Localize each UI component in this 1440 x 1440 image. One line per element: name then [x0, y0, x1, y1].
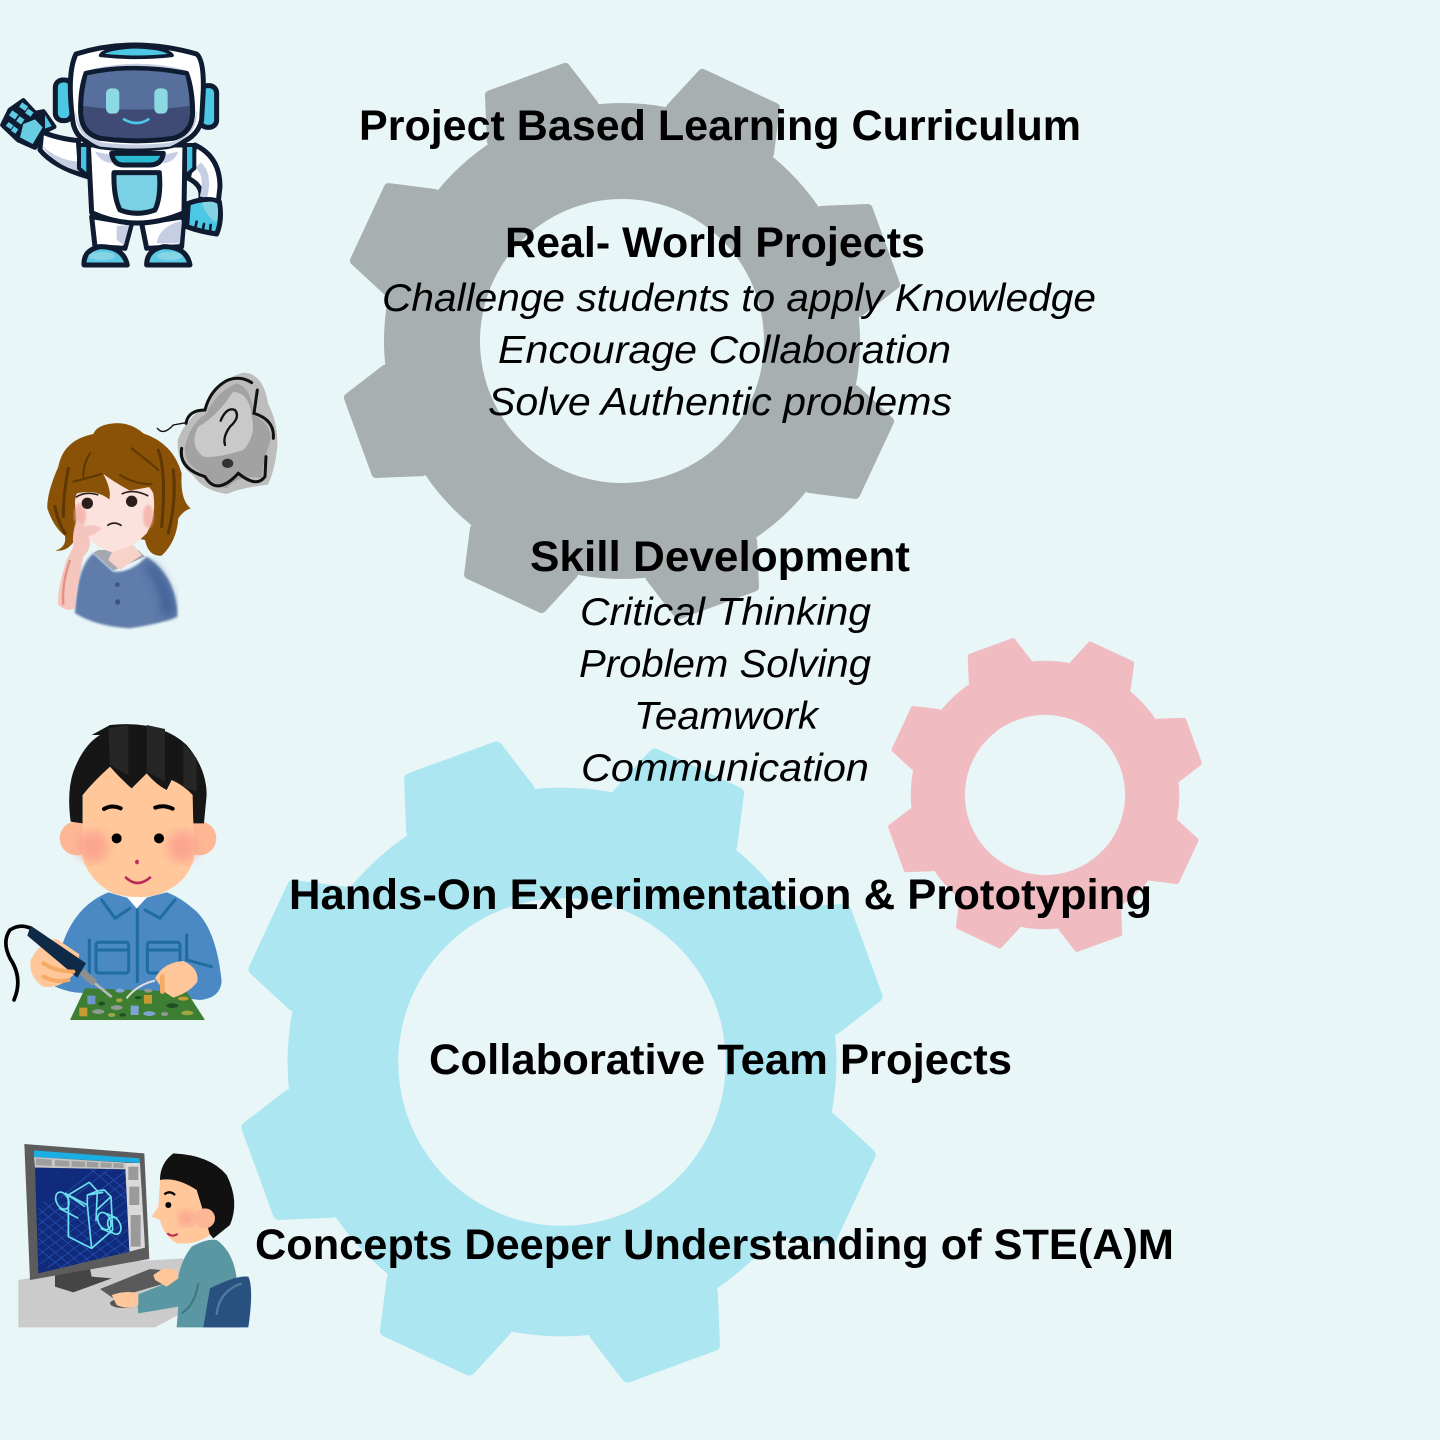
heading: real-world projects: Real- World Projects: [505, 219, 925, 267]
heading: deeper understanding of STE(A)M: Concepts Deeper Understanding of STE(A)M: [255, 1221, 1174, 1269]
robot chest panel: [114, 173, 160, 213]
list: skills: Problem Solving: [579, 643, 871, 686]
keyboard: [100, 1269, 165, 1298]
man eye: [165, 1202, 171, 1208]
robot torso: [88, 145, 185, 223]
robot smile: [124, 119, 148, 123]
robot legs: [92, 217, 184, 248]
text block: real-world projects: [382, 219, 1096, 424]
boy eyes: [112, 833, 164, 843]
monitor title bar: [34, 1150, 140, 1163]
icon: thinking girl with question cloud: [47, 373, 277, 628]
boy hair: [69, 724, 207, 823]
list: real-world project points: Challenge students to apply Knowledge: [382, 277, 1096, 320]
jacket details: [89, 900, 212, 982]
side panel: [125, 1163, 145, 1252]
monitor frame: [24, 1144, 149, 1280]
monitor stand: [55, 1268, 112, 1292]
robot ears: [55, 80, 217, 127]
list: real-world project points: [382, 277, 1096, 424]
girl arm and hand: [58, 520, 102, 610]
list: real-world project points: Encourage Collaboration: [498, 329, 951, 372]
man hands: [112, 1268, 178, 1307]
girl eyes: [82, 496, 137, 509]
boy face: [83, 767, 194, 897]
girl face: [75, 473, 154, 553]
list: skills: [579, 591, 871, 790]
girl brows and mouth: [76, 492, 148, 526]
boy collar: [127, 897, 147, 908]
hair strands: [55, 450, 174, 533]
icon: man at CAD computer: [18, 1144, 251, 1327]
board components: [79, 989, 193, 1017]
boy cheeks: [78, 831, 198, 863]
man ear: [195, 1208, 215, 1228]
robot head: [70, 45, 203, 149]
gear: large blue: [154, 654, 970, 1440]
soldering iron handle: [27, 926, 86, 978]
chair: [203, 1276, 251, 1327]
robot visor: [81, 68, 193, 141]
list: skills: Communication: [581, 747, 869, 790]
heading: hands-on experimentation: Hands-On Experimentation & Prototyping: [289, 871, 1152, 919]
girl shirt buttons: [115, 582, 120, 605]
icon: boy soldering circuit board: [6, 724, 222, 1020]
icon: robot waving: [3, 45, 221, 265]
heading: skill development: Skill Development: [530, 533, 910, 581]
thought cloud outline: [157, 378, 273, 486]
boy jacket: [55, 892, 222, 1000]
boy right hand: [155, 961, 198, 998]
robot side straps: [79, 145, 194, 177]
girl bangs: [72, 449, 155, 499]
thought cloud fill: [178, 373, 277, 494]
robot feet: [84, 247, 190, 265]
gear: large gray: [268, 0, 976, 695]
boy ears: [60, 821, 216, 855]
girl hair back: [47, 423, 191, 556]
CAD viewport: [35, 1168, 129, 1273]
monitor toolbar: [34, 1157, 125, 1169]
question dot: [222, 459, 233, 468]
list: skills: Critical Thinking: [580, 591, 871, 634]
boy brows: [104, 806, 173, 809]
man face: [152, 1179, 210, 1244]
gear: small pink: [845, 595, 1245, 995]
wire strand: [127, 981, 155, 998]
robot head cap: [101, 47, 172, 57]
robot waving arm: [40, 132, 87, 177]
list: real-world project points: Solve Authentic problems: [488, 381, 952, 424]
fingers: [43, 963, 73, 981]
boy left hand: [30, 939, 79, 987]
robot right hand: [187, 200, 221, 234]
robot waving hand: [3, 101, 54, 147]
viewport grid: [38, 1168, 133, 1275]
boy nose: [135, 860, 139, 864]
man cheek: [178, 1210, 195, 1226]
man brow and smile: [164, 1192, 175, 1195]
robot collar: [112, 153, 163, 165]
soldering iron cable: [6, 926, 31, 1000]
man hair: [160, 1153, 234, 1238]
list: skills: Teamwork: [634, 695, 821, 738]
title: Project Based Learning Curriculum: [359, 102, 1081, 150]
robot eyes: [106, 88, 168, 114]
soldering iron tip: [82, 972, 95, 983]
text block: skill development: [530, 533, 910, 790]
desk: [18, 1258, 183, 1327]
wireframe model: [53, 1182, 124, 1248]
heading: collaborative team projects: Collaborative Team Projects: [429, 1036, 1012, 1084]
girl shirt: [75, 553, 177, 628]
boy smile: [126, 878, 150, 883]
man torso: [137, 1240, 240, 1327]
robot right arm: [188, 145, 220, 202]
circuit board: [70, 988, 205, 1020]
